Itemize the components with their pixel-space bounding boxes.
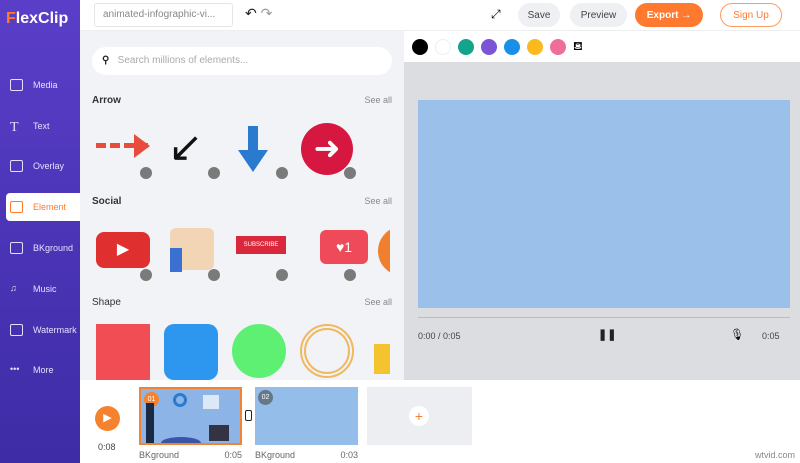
- menu: watermark: Watermark: [33, 325, 77, 335]
- panel: elements: See all: [364, 196, 392, 206]
- panel: elements: [80, 31, 404, 380]
- menu: text: T: [10, 120, 19, 135]
- clip 2 label: 0:03: [340, 450, 358, 460]
- timeline: 0:08: [98, 442, 116, 452]
- top bar: [80, 0, 800, 31]
- progress line: [418, 317, 790, 318]
- preview area: [404, 62, 800, 380]
- sidebar: [0, 0, 80, 463]
- export: Export →: [647, 10, 691, 20]
- clip 2 label: [255, 450, 358, 460]
- clip 2 label: BKground: [255, 450, 295, 460]
- menu: overlay: Overlay: [33, 161, 64, 171]
- duration: 0:05: [762, 331, 780, 341]
- arrow icons: [96, 123, 356, 179]
- panel: elements: See all: [364, 297, 392, 307]
- menu: media: [10, 79, 58, 91]
- preview: [570, 3, 627, 27]
- undo redo: ↶ ↷: [245, 5, 272, 21]
- color toolbar: [404, 31, 800, 62]
- menu: text: Text: [33, 121, 50, 131]
- fullscreen icon: ⤢: [491, 7, 501, 21]
- menu: media: Media: [33, 80, 58, 90]
- panel: elements: See all: [364, 95, 392, 105]
- shapes: [96, 324, 390, 380]
- search: ⚲ Search millions of elements...: [102, 55, 248, 66]
- menu: more: [10, 364, 54, 375]
- filename box: [94, 3, 233, 27]
- play button: [95, 406, 120, 431]
- heading social: Social: [92, 196, 121, 207]
- pause: ❚❚: [598, 329, 616, 341]
- social icons: ▶: [117, 241, 129, 258]
- watermark: wtvid.com: [755, 450, 795, 460]
- clip 1 label: [139, 450, 242, 460]
- heading shape: Shape: [92, 297, 121, 308]
- save: [518, 3, 560, 27]
- timeline: [80, 380, 800, 463]
- arrow icons: ➜: [314, 130, 340, 166]
- preview: Preview: [581, 10, 616, 20]
- clip 1 label: 0:05: [224, 450, 242, 460]
- add clip: +: [415, 408, 423, 424]
- clip 1: 01: [148, 396, 155, 403]
- export: [635, 3, 703, 27]
- sign up: [720, 3, 782, 27]
- filename box: animated-infographic-vi...: [103, 9, 215, 20]
- menu: more: More: [33, 365, 54, 375]
- menu: element active: Element: [33, 202, 66, 212]
- clip 1: [139, 387, 242, 445]
- social icons: SUBSCRIBE: [244, 242, 278, 248]
- social icons: ♥1: [336, 239, 352, 255]
- menu: bkground: BKground: [33, 243, 73, 253]
- arrow icons: ↙: [168, 123, 203, 170]
- mic: 🎙: [730, 329, 744, 341]
- play button: ▶: [103, 412, 112, 424]
- heading arrow: Arrow: [92, 95, 121, 106]
- time: 0:00 / 0:05: [418, 331, 461, 341]
- menu: element active: [6, 193, 80, 221]
- menu: watermark: [10, 324, 77, 336]
- menu: more: •••: [10, 364, 19, 374]
- canvas: [418, 100, 790, 308]
- search: [92, 47, 392, 75]
- menu: music: Music: [33, 284, 57, 294]
- logo: FlexClip: [6, 10, 68, 27]
- clip 2: [255, 387, 358, 445]
- clip 2: 02: [262, 394, 269, 401]
- menu: bkground: [10, 242, 73, 254]
- transition icon: [245, 410, 252, 421]
- color toolbar: ⛾: [573, 39, 583, 53]
- menu: text: [10, 120, 50, 135]
- collapse tab: ‹: [408, 204, 410, 214]
- collapse tab: [404, 180, 414, 238]
- menu: overlay: [10, 160, 64, 172]
- social icons: [96, 228, 390, 281]
- sign up: Sign Up: [733, 10, 769, 20]
- menu: music: [10, 283, 57, 294]
- save: Save: [528, 10, 550, 20]
- add clip: [367, 387, 472, 445]
- menu: music: ♫: [10, 283, 17, 293]
- clip 1 label: BKground: [139, 450, 179, 460]
